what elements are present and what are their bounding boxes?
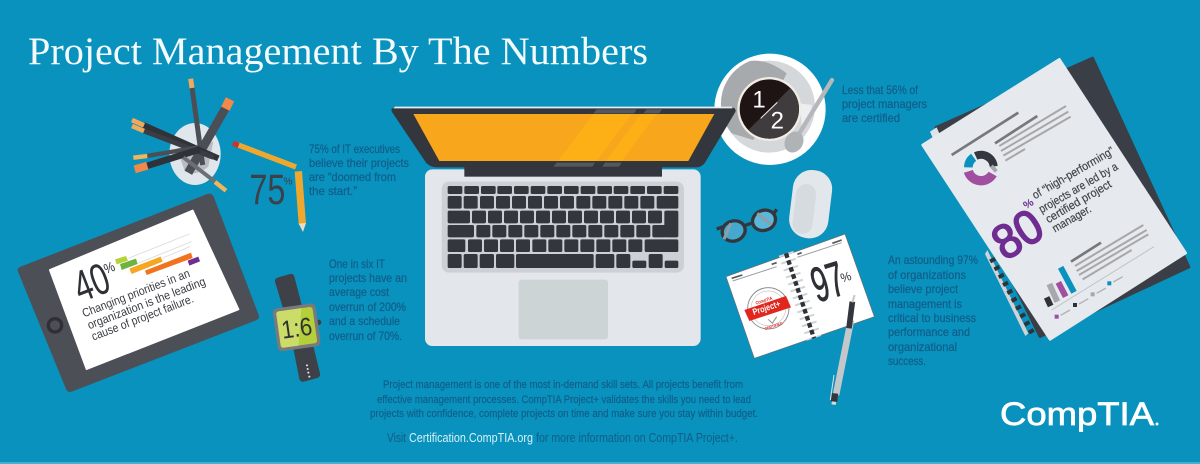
illustration: mouse bbox=[787, 168, 834, 240]
text: 75 percent of executives bbox=[309, 142, 409, 198]
text: 75 percent of executives: 75% of IT executives bbox=[309, 142, 400, 156]
illustration: tablet with 40%: organization is the leading bbox=[85, 274, 207, 332]
text: website call to action: for more information on CompTIA Project+. bbox=[536, 431, 738, 445]
laptop base bbox=[425, 169, 701, 346]
illustration: tablet with 40%: % bbox=[101, 258, 117, 277]
text: less than 56% certified: are certified bbox=[842, 111, 900, 125]
text: 97 percent of organizations: of organizations bbox=[888, 268, 966, 282]
title: Project Management By The Numbers bbox=[28, 30, 648, 73]
text: 75 percent of executives: the start.” bbox=[309, 184, 357, 198]
illustration: watch showing 1:6 bbox=[272, 274, 321, 382]
text: one in six projects: projects have an bbox=[329, 271, 407, 285]
illustration: coffee cup with one half bbox=[714, 54, 832, 165]
text: 97 percent of organizations: success. bbox=[888, 354, 926, 368]
illustration: report document with 80%: manager. bbox=[1050, 203, 1094, 235]
illustration: coffee cup with one half: 2 bbox=[771, 107, 784, 134]
illustration: glasses bbox=[717, 207, 778, 244]
text: less than 56% certified: Less that 56% of bbox=[842, 83, 919, 97]
text: 97 percent of organizations: An astounding 97% bbox=[888, 253, 978, 267]
illustration: laptop bbox=[391, 107, 736, 346]
text: one in six projects: One in six IT bbox=[329, 257, 385, 271]
illustration: report document with 80%: 80 bbox=[983, 199, 1053, 271]
illustration: watch showing 1:6: 1:6 bbox=[280, 313, 314, 345]
illustration: report document with 80%: projects are led by a bbox=[1037, 160, 1121, 216]
donut chart bbox=[968, 155, 995, 181]
text: website call to action: Visit bbox=[387, 431, 406, 445]
illustration: report document with 80% bbox=[923, 58, 1189, 339]
text: one in six projects bbox=[329, 257, 407, 343]
text: 75 percent of executives: are “doomed from bbox=[309, 170, 396, 184]
text: closing paragraph bbox=[370, 379, 758, 420]
illustration: broken pencil with 75% bbox=[233, 143, 306, 232]
text: 97 percent of organizations: believe project bbox=[888, 282, 959, 296]
text: website call to action: Certification.CompTIA.org bbox=[409, 431, 533, 445]
text: one in six projects: and a schedule bbox=[329, 314, 400, 328]
illustration: pencil cup bbox=[132, 79, 230, 191]
certification badge: CompTIA bbox=[755, 295, 773, 306]
text: 97 percent of organizations: management is bbox=[888, 297, 962, 311]
certification badge: Project+ bbox=[751, 299, 782, 317]
text: 97 percent of organizations: performance and bbox=[888, 325, 970, 339]
illustration: report document with 80%: certified project bbox=[1043, 177, 1115, 226]
illustration: broken pencil with 75%: % bbox=[283, 177, 292, 188]
text: closing paragraph: Project management is one of the most in-demand skill sets. All projects benefit from bbox=[383, 379, 743, 391]
illustration: tablet with 40%: 40 bbox=[67, 254, 117, 312]
text: closing paragraph: projects with confidence, complete projects on time and make sure you stay within budget. bbox=[370, 408, 758, 420]
text: closing paragraph: effective management processes. CompTIA Project+ validates the skills you need to lead bbox=[377, 394, 751, 406]
certification badge bbox=[744, 288, 791, 331]
text: less than 56% certified: project managers bbox=[842, 97, 927, 111]
certification badge: CERTIFIED bbox=[764, 321, 783, 331]
illustration: notebook with 97%: 97 bbox=[804, 251, 851, 313]
keyboard bbox=[442, 182, 684, 273]
text: 97 percent of organizations: critical to business bbox=[888, 311, 976, 325]
text: one in six projects: overrun of 200% bbox=[329, 300, 406, 314]
illustration: broken pencil with 75%: 75 bbox=[249, 166, 285, 214]
illustration: notebook with 97% bbox=[726, 234, 874, 405]
illustration: tablet with 40%: cause of project failure. bbox=[89, 292, 196, 343]
illustration: report document with 80%: % bbox=[1021, 196, 1037, 212]
illustration: tablet with 40%: Changing priorities in an bbox=[80, 266, 192, 320]
pen bbox=[830, 295, 855, 405]
illustration: tablet with 40% bbox=[18, 194, 259, 392]
laptop screen bbox=[391, 107, 736, 168]
text: 97 percent of organizations bbox=[888, 253, 978, 368]
text: less than 56% certified bbox=[842, 83, 927, 125]
text: website call to action bbox=[387, 431, 738, 445]
text: 97 percent of organizations: organizational bbox=[888, 340, 957, 354]
illustration: coffee cup with one half: 1 bbox=[752, 86, 766, 113]
text: 75 percent of executives: believe their projects bbox=[309, 156, 409, 170]
illustration: notebook with 97%: % bbox=[839, 269, 853, 286]
illustration: report document with 80%: of “high-performing” bbox=[1030, 144, 1117, 202]
trackpad bbox=[519, 280, 608, 339]
text: one in six projects: overrun of 70%. bbox=[329, 329, 402, 343]
text: one in six projects: average cost bbox=[329, 285, 390, 299]
logo: CompTIA: CompTIA bbox=[1000, 396, 1155, 432]
bar chart bbox=[1047, 267, 1074, 306]
